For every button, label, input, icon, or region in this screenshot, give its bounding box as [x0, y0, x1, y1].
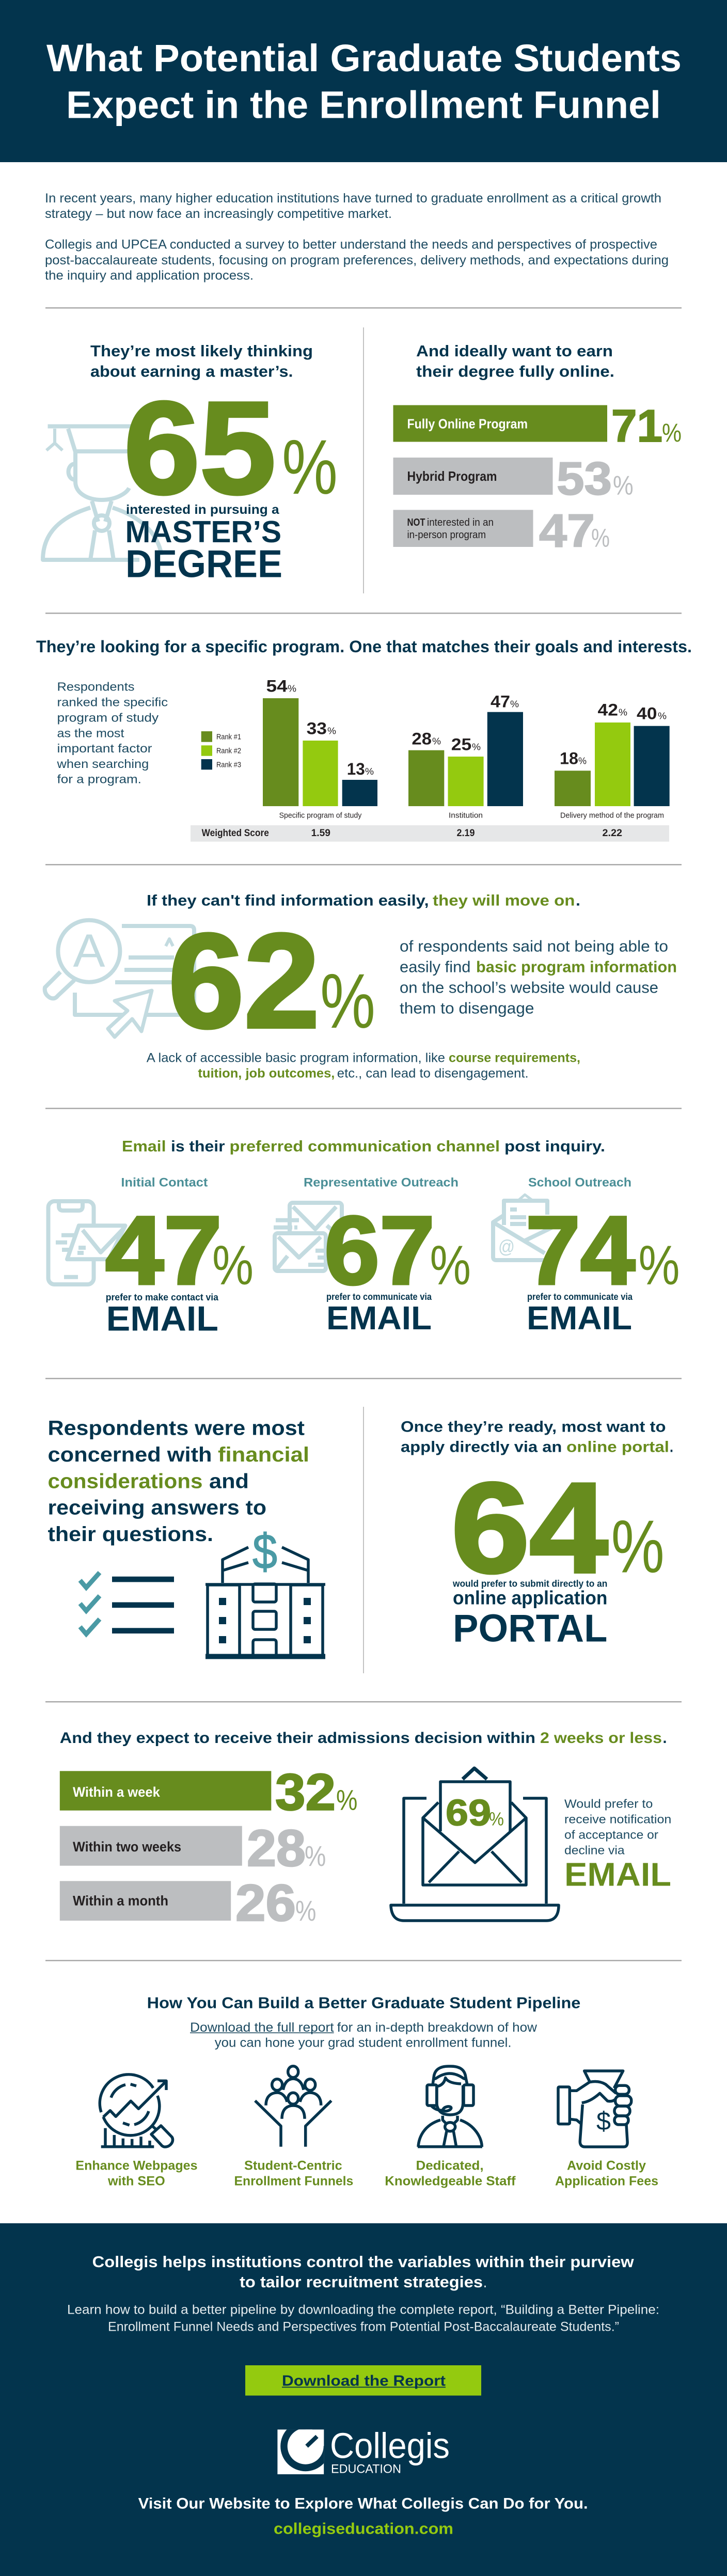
- intro text: strategy – but now face an increasingly competitive market.: [45, 207, 392, 221]
- label: student-centric: Enrollment Funnels: [234, 2174, 353, 2189]
- legend: Rank #2: [216, 747, 241, 756]
- heading: two weeks or less: 2 weeks or less: [540, 1730, 662, 1747]
- label: enhance webpages: with SEO: [107, 2174, 165, 2189]
- heading: online portal: apply directly via an: [401, 1438, 562, 1455]
- item: enhance webpages with SEO: [75, 2075, 197, 2189]
- text: notification via email: decline via: [564, 1844, 625, 1857]
- panel: build a better pipeline: [75, 1993, 658, 2189]
- bars: specific program of study: 54: [266, 677, 288, 695]
- bars: institution: Institution: [449, 811, 483, 820]
- panel: admissions decision: [60, 1730, 671, 1932]
- weighted score row: 2.19: [456, 828, 475, 839]
- stat: 62%: %: [320, 957, 375, 1044]
- icon: open envelope with letter: [493, 1195, 556, 1260]
- icon: magnifier on document: A: [73, 925, 105, 977]
- text: lack of information note: tuition, job outcomes,: [198, 1066, 335, 1081]
- weighted score row: 2.22: [602, 828, 622, 839]
- bars: delivery method: 40: [637, 704, 657, 723]
- heading: financial considerations: concerned with: [48, 1443, 212, 1466]
- logo: Collegis Education: [277, 2429, 449, 2474]
- footer heading: to tailor recruitment strategies: [240, 2273, 483, 2291]
- icon: phone and envelope: [49, 1201, 125, 1284]
- bars: institution: 25: [451, 735, 471, 754]
- label: enhance webpages: Enhance Webpages: [75, 2159, 197, 2173]
- text: notification via email: EMAIL: [564, 1856, 671, 1893]
- text: respondents description: of respondents said not being able to: [400, 937, 668, 955]
- footer panel: [0, 2223, 727, 2576]
- text: lack of information note: [147, 1051, 580, 1081]
- bar: not in-person 47%: [393, 505, 610, 557]
- label: student-centric: [234, 2159, 353, 2189]
- link: collegiseducation.com: collegiseducation.com: [274, 2520, 453, 2538]
- title: What Potential Graduate Students: [46, 37, 682, 80]
- intro text: In recent years, many higher education institutions have turned to graduate enrollment as a critical growth: [45, 191, 661, 206]
- bars: specific program of study: 13: [347, 760, 365, 778]
- panel: delivery preference: [393, 342, 682, 557]
- icon: laptop with envelope: [391, 1768, 559, 1921]
- heading: financial considerations: and: [209, 1470, 249, 1493]
- heading: they will move on: [147, 892, 580, 909]
- caption: make contact via email: prefer to make contact via: [106, 1292, 219, 1302]
- title: Expect in the Enrollment Funnel: [66, 84, 661, 126]
- caption: school communicate via email: prefer to communicate via: [527, 1292, 633, 1302]
- bar: within two weeks 28%: %: [305, 1840, 326, 1872]
- panel: email preference: [49, 1138, 679, 1339]
- footer heading: Collegis helps institutions control the variables within their purview: [92, 2253, 635, 2271]
- bar: within a week 32%: 32: [275, 1763, 336, 1821]
- bars: delivery method: Delivery method of the program: [560, 811, 664, 820]
- text: download the full report: [190, 2020, 538, 2050]
- bars: delivery method: 42: [598, 700, 618, 719]
- heading: they will move on: .: [576, 892, 580, 909]
- bar: not in-person 47%: 47: [539, 505, 595, 557]
- weighted score row: 1.59: [311, 828, 330, 839]
- bar chart: [263, 677, 670, 820]
- icon: two envelopes: [274, 1203, 342, 1271]
- heading: preferred channel: Email: [122, 1138, 166, 1155]
- stat: 64%: 64: [451, 1456, 608, 1599]
- icon: funnel of students: [255, 2066, 331, 2147]
- bar: within a month 26%: 26: [235, 1874, 296, 1932]
- bar: within a week 32%: Within a week: [73, 1784, 161, 1800]
- footer text: [67, 2302, 659, 2334]
- heading: two weeks or less: .: [663, 1730, 667, 1747]
- legend: [201, 731, 241, 769]
- heading: online portal: Once they’re ready, most want to: [401, 1419, 666, 1436]
- label: student-centric: Student-Centric: [244, 2159, 342, 2173]
- label: enhance webpages: [75, 2159, 197, 2189]
- intro text: the inquiry and application process.: [45, 269, 254, 283]
- header panel: [0, 0, 727, 162]
- bar: fully online 71%: [393, 400, 682, 451]
- bars: specific program of study: %: [327, 726, 336, 736]
- bar: not in-person 47%: interested in an: [427, 517, 494, 528]
- label: dedicated staff: Dedicated,: [416, 2159, 484, 2173]
- bar: hybrid 53%: 53: [557, 453, 612, 505]
- button: download the report: [245, 2365, 481, 2396]
- footer text: Enrollment Funnel Needs and Perspectives from Potential Post-Baccalaureate Students.”: [108, 2320, 619, 2334]
- column: school outreach: [493, 1175, 679, 1337]
- caption: online application portal: [452, 1578, 607, 1650]
- heading: financial considerations: their questions.: [48, 1523, 213, 1546]
- bar: not in-person 47%: %: [591, 524, 610, 553]
- bars: delivery method: %: [578, 756, 587, 766]
- bar: within a month 26%: %: [295, 1894, 316, 1927]
- stat: 65%: %: [282, 423, 338, 510]
- caption: master's degree: DEGREE: [125, 542, 282, 585]
- footer heading: [92, 2253, 635, 2291]
- stat: 64%: %: [611, 1505, 665, 1589]
- heading: fully online: [416, 342, 614, 380]
- heading: financial considerations: Respondents were most: [48, 1417, 305, 1440]
- icon: building with dollar: $: [252, 1524, 277, 1579]
- bars: institution: [408, 692, 523, 820]
- text: respondents description: easily find: [400, 957, 471, 976]
- text: notification via email: Would prefer to: [564, 1797, 653, 1811]
- bars: specific program of study: 33: [307, 719, 327, 738]
- bar: within a week 32%: [60, 1763, 357, 1821]
- legend: Rank #3: [216, 761, 241, 769]
- subheading: initial contact: Initial Contact: [121, 1175, 208, 1189]
- bars: institution: %: [472, 742, 481, 752]
- bars: specific program of study: %: [365, 766, 374, 777]
- bar: within two weeks 28%: 28: [247, 1819, 306, 1877]
- caption: online application portal: PORTAL: [453, 1607, 607, 1650]
- caption: online application portal: would prefer to submit directly to an: [452, 1578, 607, 1589]
- bar: hybrid 53%: [393, 453, 634, 505]
- text: respondents description: on the school’s website would cause: [400, 978, 658, 996]
- stat: 69%: [446, 1793, 504, 1833]
- bars: specific program of study: Specific program of study: [279, 811, 362, 820]
- description text: program of study: [57, 711, 159, 724]
- heading: financial considerations: financial: [218, 1443, 309, 1466]
- caption: master's degree: interested in pursuing a: [126, 502, 280, 517]
- text: notification via email: receive notification: [564, 1813, 671, 1826]
- item: avoid application fees: [555, 2071, 658, 2189]
- caption: master's degree: MASTER’S: [125, 515, 281, 549]
- heading: fully online: their degree fully online.: [416, 362, 614, 380]
- icon: hand holding money bag: [558, 2071, 631, 2147]
- caption: online application portal: online application: [453, 1588, 607, 1609]
- caption: make contact via email: EMAIL: [106, 1299, 218, 1339]
- heading: preferred channel: is their: [171, 1138, 225, 1155]
- bars: delivery method: 18: [560, 749, 578, 767]
- text: respondents description: [400, 937, 677, 1017]
- text: lack of information note: etc., can lead to disengagement.: [337, 1066, 529, 1081]
- description text: for a program.: [57, 773, 141, 786]
- bar: fully online 71%: Fully Online Program: [407, 416, 528, 432]
- text: visit our website: Visit Our Website to Explore What Collegis Can Do for You.: [138, 2495, 588, 2512]
- text: lack of information note: A lack of accessible basic program information, like: [147, 1051, 445, 1065]
- stat: 69%: %: [489, 1809, 504, 1829]
- bars: delivery method: %: [619, 707, 627, 717]
- icon: SEO magnifier: [100, 2075, 173, 2147]
- bar: fully online 71%: %: [662, 418, 682, 447]
- logo: Collegis Education: EDUCATION: [331, 2462, 401, 2476]
- icon: hand holding money bag: $: [596, 2107, 611, 2135]
- heading: financial considerations: receiving answers to: [48, 1497, 266, 1519]
- heading: fully online: And ideally want to earn: [416, 342, 613, 360]
- panel: financial considerations: [48, 1417, 325, 1657]
- description text: ranked the specific: [57, 696, 168, 709]
- stat: 74%: 74: [526, 1196, 635, 1305]
- heading: preferred channel: post inquiry.: [504, 1138, 605, 1155]
- icon: graduate: [43, 427, 162, 560]
- bar: within two weeks 28%: [60, 1819, 326, 1877]
- bars: delivery method: %: [658, 711, 667, 721]
- panel: online portal: [401, 1419, 673, 1650]
- description text: as the most: [57, 726, 124, 740]
- text: respondents description: them to disengage: [400, 999, 534, 1017]
- bar: not in-person 47%: in-person program: [407, 529, 486, 541]
- heading: preferred channel: [122, 1138, 605, 1155]
- label: dedicated staff: Knowledgeable Staff: [385, 2174, 516, 2189]
- stat: 65%: 65: [124, 374, 276, 521]
- stat: 47%: 47: [105, 1196, 222, 1305]
- heading: better pipeline: How You Can Build a Better Graduate Student Pipeline: [147, 1993, 580, 2012]
- column: initial contact: [49, 1175, 254, 1339]
- bar: not in-person 47%: NOT: [407, 517, 425, 528]
- stat: 65%: [124, 374, 338, 521]
- bar: within a month 26%: Within a month: [73, 1893, 168, 1908]
- stat: 74%: %: [638, 1234, 679, 1296]
- panel: master's degree: [43, 342, 338, 585]
- footer heading: .: [483, 2273, 487, 2291]
- icon: open envelope with letter: @: [498, 1236, 515, 1257]
- heading: financial considerations: considerations: [48, 1470, 202, 1493]
- caption: communicate via email: prefer to communicate via: [326, 1292, 432, 1302]
- footer text: Learn how to build a better pipeline by downloading the complete report, “Building a Better Pipeline:: [67, 2302, 659, 2317]
- stat: 62%: 62: [168, 906, 320, 1056]
- stat: 47%: %: [212, 1234, 254, 1296]
- heading: financial considerations: [48, 1417, 309, 1546]
- bars: institution: 28: [412, 730, 432, 748]
- description text: important factor: [57, 742, 152, 755]
- description text: when searching: [56, 757, 149, 771]
- heading: thinking about a master's: about earning a master’s.: [90, 362, 293, 380]
- caption: master's degree: [125, 502, 282, 585]
- caption: communicate via email: EMAIL: [326, 1299, 432, 1337]
- heading: specific program: They’re looking for a specific program. One that matches their goals and interests.: [36, 637, 692, 656]
- heading: they will move on: If they can't find information easily,: [147, 892, 429, 909]
- item: student-centric funnels: [234, 2066, 353, 2189]
- label: avoid costly fees: Application Fees: [555, 2174, 658, 2189]
- bars: institution: %: [432, 736, 441, 747]
- icon: magnifier on document: [45, 920, 194, 1037]
- bars: institution: %: [510, 699, 519, 709]
- stat: 64%: [451, 1456, 665, 1599]
- column: representative outreach: [274, 1175, 471, 1337]
- caption: school communicate via email: EMAIL: [527, 1299, 632, 1337]
- bar: hybrid 53%: %: [613, 471, 634, 501]
- panel: specific program chart: [36, 637, 692, 842]
- bars: specific program of study: %: [288, 683, 296, 694]
- icon: building with dollar: [206, 1524, 325, 1657]
- label: avoid costly fees: [555, 2159, 658, 2189]
- weighted score row: [191, 825, 669, 842]
- bars: specific program of study: [263, 677, 377, 820]
- item: knowledgeable staff: [385, 2066, 516, 2189]
- intro text: Collegis and UPCEA conducted a survey to better understand the needs and perspectives of prospective: [45, 238, 657, 252]
- bar: fully online 71%: 71: [611, 400, 662, 451]
- text: respondents description: basic program information: [476, 957, 677, 976]
- bar: within two weeks 28%: Within two weeks: [73, 1839, 181, 1855]
- legend: Rank #1: [216, 733, 241, 742]
- text: download the full report: Download the full report: [190, 2020, 334, 2035]
- title: [46, 37, 682, 126]
- label: dedicated staff: [385, 2159, 516, 2189]
- description text: [56, 680, 168, 786]
- bars: institution: 47: [491, 692, 510, 711]
- heading: online portal: .: [670, 1438, 673, 1455]
- panel: disengagement: [45, 892, 677, 1081]
- heading: they will move on: they will move on: [433, 892, 575, 909]
- subheading: school outreach: School Outreach: [528, 1175, 631, 1189]
- logo: Collegis Education: Collegis: [330, 2426, 450, 2466]
- label: avoid costly fees: Avoid Costly: [567, 2159, 646, 2173]
- heading: thinking about a master's: They’re most likely thinking: [90, 342, 313, 360]
- stat: 67%: %: [430, 1234, 471, 1296]
- heading: preferred channel: preferred communication channel: [229, 1138, 500, 1155]
- heading: online portal: [401, 1419, 673, 1455]
- heading: online portal: online portal: [566, 1438, 669, 1455]
- bar: within a month 26%: [60, 1874, 316, 1932]
- description text: Respondents: [57, 680, 134, 694]
- text: lack of information note: course requirements,: [449, 1051, 580, 1065]
- heading: thinking about a master's: [90, 342, 313, 380]
- bar: within a week 32%: %: [336, 1784, 357, 1816]
- icon: checklist: [80, 1573, 174, 1634]
- weighted score row: Weighted Score: [202, 828, 269, 839]
- button: download the report: Download the Report: [282, 2373, 446, 2389]
- intro text: [45, 191, 669, 283]
- icon: support agent: [418, 2066, 482, 2147]
- text: download the full report: for an in-depth breakdown of how: [337, 2020, 538, 2035]
- heading: two weeks or less: And they expect to receive their admissions decision within: [60, 1730, 535, 1747]
- text: notification via email: of acceptance or: [564, 1828, 658, 1842]
- bar: hybrid 53%: Hybrid Program: [407, 468, 497, 484]
- stat: 67%: 67: [324, 1196, 435, 1305]
- stat: 69%: 69: [446, 1793, 491, 1833]
- text: notification via email: [564, 1797, 671, 1893]
- subheading: representative outreach: Representative Outreach: [304, 1175, 459, 1189]
- text: download the full report: you can hone your grad student enrollment funnel.: [215, 2035, 511, 2050]
- intro text: post-baccalaureate students, focusing on program preferences, delivery methods, and expectations during: [45, 253, 669, 268]
- bars: delivery method: [555, 700, 670, 820]
